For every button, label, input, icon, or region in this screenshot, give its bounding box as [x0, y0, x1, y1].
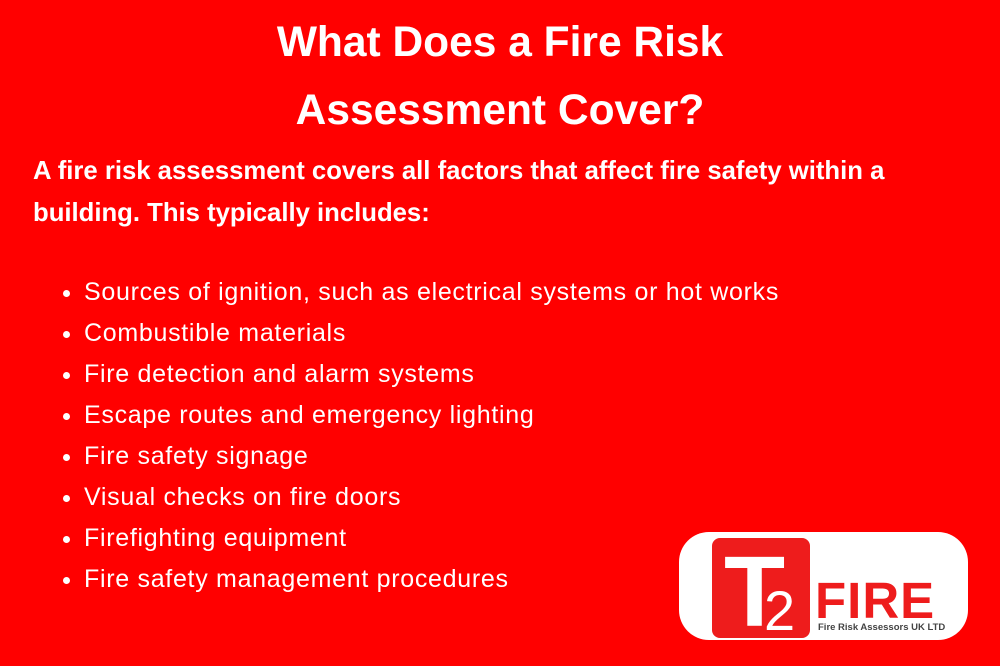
logo: Fire Risk Assessors UK LTD [818, 622, 945, 633]
intro text [33, 157, 885, 227]
logo mark: T2: 2 [764, 579, 795, 642]
logo mark: T2 [712, 538, 810, 638]
logo text: FIRE [815, 572, 935, 629]
bullet list [63, 278, 779, 593]
title: Assessment Cover? [296, 87, 704, 134]
intro text: building. This typically includes: [33, 199, 430, 227]
bullet list: Escape routes and emergency lighting [84, 401, 534, 429]
intro text: A fire risk assessment covers all factors that affect fire safety within a [33, 157, 884, 185]
bullet list: Fire safety management procedures [84, 565, 509, 593]
bullet list: Firefighting equipment [84, 524, 347, 552]
title [276, 19, 724, 134]
bullet list: Fire detection and alarm systems [84, 360, 475, 388]
logo mark: T2: T [724, 536, 785, 648]
logo [679, 532, 968, 640]
bullet list: Combustible materials [84, 319, 346, 347]
title: What Does a Fire Risk [277, 19, 723, 66]
bullet list: Sources of ignition, such as electrical systems or hot works [84, 278, 779, 306]
bullet list: Visual checks on fire doors [84, 483, 401, 511]
bullet list: Fire safety signage [84, 442, 309, 470]
